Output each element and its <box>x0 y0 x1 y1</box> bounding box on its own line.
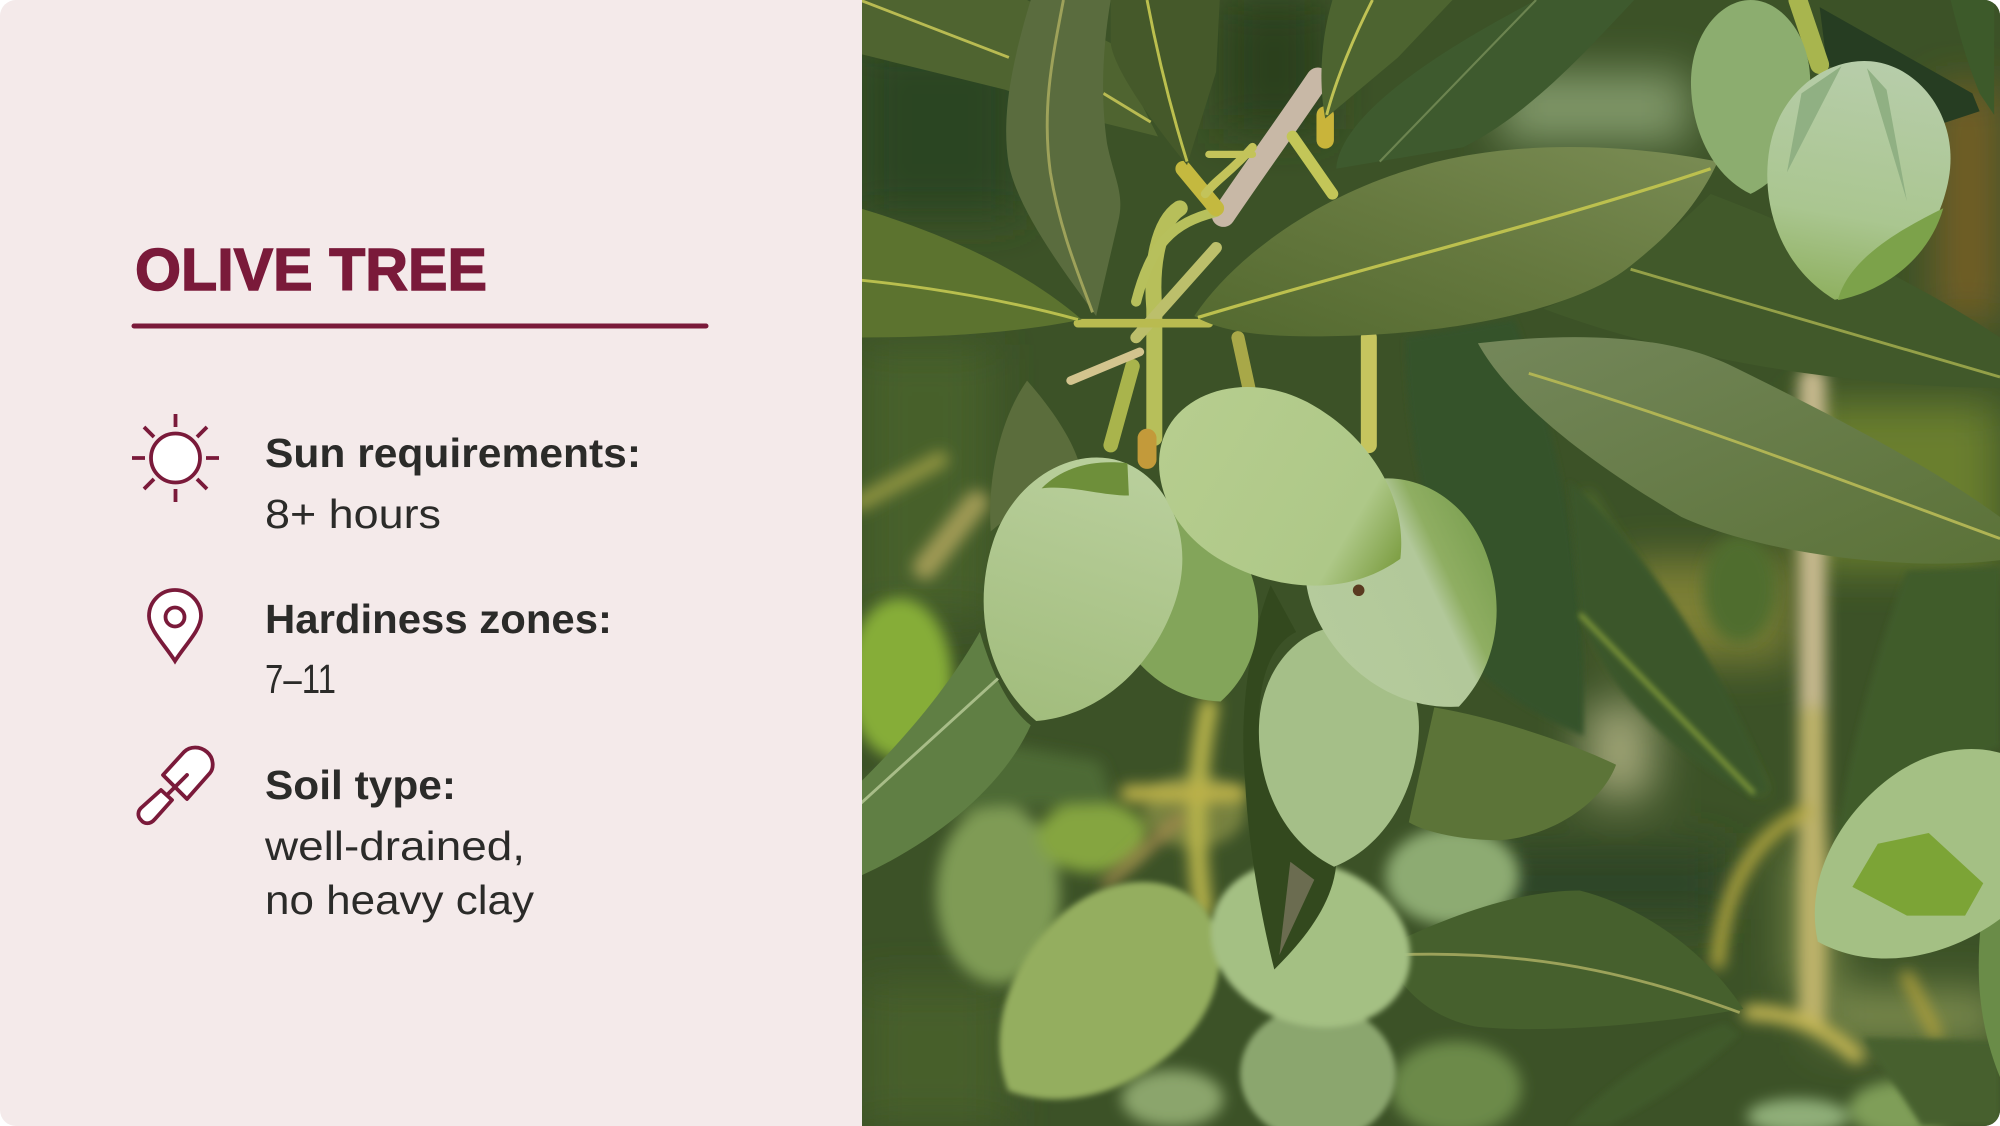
text: soil value: well-drained, <box>264 823 525 869</box>
leaf: right dark below large <box>1543 194 2000 388</box>
olive: top centre <box>1123 349 1446 636</box>
leaf: upper centre vertical <box>1111 0 1220 165</box>
leaf: lower right large <box>1383 890 1743 1029</box>
leaf: top left <box>860 0 1158 136</box>
leaf: bottom dark <box>1569 1023 1740 1126</box>
row: hardiness zones <box>149 590 612 702</box>
leaf: behind cluster <box>990 381 1078 531</box>
text: soil label: Soil type: <box>265 762 456 808</box>
leaves in front of the stems <box>860 0 2000 969</box>
text: soil value: no heavy clay <box>265 877 535 923</box>
icon: map pin <box>149 590 201 661</box>
leaf: far right blurred <box>1834 567 2000 862</box>
text: soil value <box>264 823 535 923</box>
olive: behind centre <box>1085 495 1289 726</box>
olive: front top right <box>1745 47 1967 315</box>
text: hardiness label: Hardiness zones: <box>265 596 612 642</box>
olive: behind top right <box>1691 0 1810 194</box>
row: soil type <box>138 748 535 923</box>
leaf: left mid <box>860 208 1082 338</box>
blurred branches <box>860 381 1936 1056</box>
text: sun value: 8+ hours <box>265 491 441 537</box>
leaf: upper small <box>1321 0 1452 118</box>
olive: left large <box>945 432 1211 750</box>
leaves behind the stems <box>860 0 2000 1126</box>
icon: sun <box>132 414 219 502</box>
leaf: large right <box>1478 337 2000 564</box>
stems and branches <box>1071 0 1820 460</box>
olive: right edge <box>1764 707 2000 1013</box>
leaf: large centre <box>1194 147 1718 336</box>
leaf: central dark vertical <box>1405 320 1584 736</box>
olive: lower right in cluster <box>1272 447 1541 745</box>
blurred background olives <box>946 834 1434 1126</box>
leaf: top right dark <box>1820 7 1980 126</box>
blurred background foliage <box>847 0 2000 1126</box>
leaf: right edge <box>1979 847 2000 1077</box>
leaf: dark right diagonal <box>1569 481 1769 797</box>
row: sun requirements <box>132 414 641 537</box>
olives upper right <box>1691 0 1967 315</box>
photo: olive branch with green olives <box>862 0 2000 1126</box>
olive cluster <box>945 349 1541 869</box>
leaf: lower left <box>860 632 1031 876</box>
title: OLIVE TREE <box>135 237 487 303</box>
text: sun label: Sun requirements: <box>265 430 641 476</box>
panel: plant facts <box>0 0 862 1126</box>
leaf: top dark long <box>1336 0 1634 169</box>
leaf: upper left vertical <box>1006 0 1120 316</box>
olive: hanging lowest <box>1254 624 1422 869</box>
leaf: lower centre <box>1409 707 1616 840</box>
leaf: lower right dark <box>1863 1038 2000 1126</box>
olive: stem scar <box>1353 585 1364 596</box>
leaf: hanging dark <box>1243 585 1336 969</box>
icon: trowel <box>138 748 213 823</box>
text: hardiness value: 7–11 <box>265 656 336 702</box>
